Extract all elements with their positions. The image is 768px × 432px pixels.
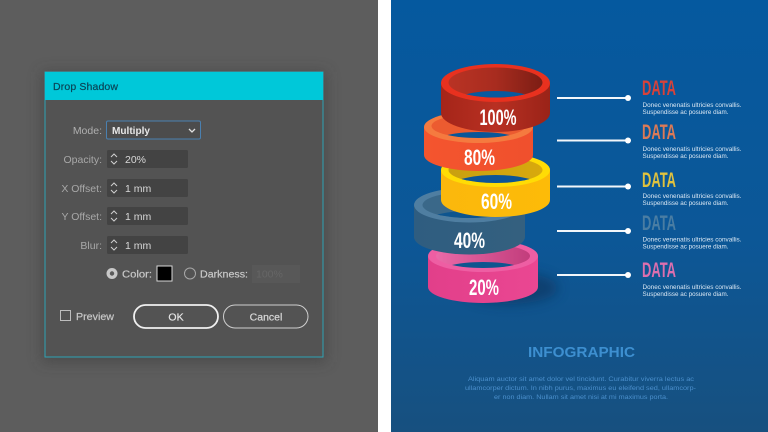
OK button: OK (168, 312, 184, 324)
color and darkness row: Color: (122, 268, 152, 280)
ring: 100% red: 100% (480, 105, 516, 130)
color and darkness row: 100% (256, 268, 283, 280)
x offset row: X Offset: (61, 183, 102, 195)
opacity row: Opacity: (63, 154, 102, 166)
opacity row: 20% (125, 154, 146, 166)
label block: slate data: Donec venenatis ultricies convallis. (642, 238, 742, 244)
body paragraph: Aliquam auctor sit amet dolor vel tincidunt. Curabitur viverra lectus ac (468, 376, 695, 383)
ring: 80% orange: 80% (464, 145, 495, 170)
mode row (73, 121, 200, 139)
label block: pink data: DATA (642, 259, 676, 282)
Cancel button: Cancel (250, 312, 282, 324)
preview checkbox (60, 310, 114, 323)
panel: left gray background (0, 0, 378, 432)
dialog title bar (45, 72, 323, 100)
mode row: Multiply (112, 125, 150, 137)
label block: orange data: DATA (642, 121, 676, 144)
label block: pink data: Suspendisse ac posuere diam. (642, 292, 729, 298)
body paragraph (465, 376, 696, 401)
mode row: Mode: (73, 125, 102, 137)
y offset row (62, 207, 188, 225)
preview checkbox: Preview (76, 311, 114, 323)
label block: yellow data (642, 169, 742, 207)
heading: infographic: INFOGRAPHIC (528, 345, 636, 361)
shadow under ring stack (462, 272, 558, 304)
label block: orange data (642, 121, 742, 160)
y offset row: 1 mm (125, 211, 152, 223)
connector line: 40% (557, 228, 631, 234)
ring: 60% yellow (441, 153, 550, 217)
connector line: 80% (557, 138, 631, 144)
ring: 40% slate blue: 40% (454, 228, 485, 253)
panel: right blue background (391, 0, 768, 432)
label block: red data (642, 77, 742, 116)
x offset row: 1 mm (125, 183, 152, 195)
opacity row (63, 150, 188, 168)
blur row: 1 mm (125, 240, 152, 252)
label block: red data: DATA (642, 77, 676, 100)
color and darkness row: Darkness: (200, 268, 248, 280)
label block: orange data: Suspendisse ac posuere diam. (642, 154, 729, 160)
label block: pink data: Donec venenatis ultricies convallis. (642, 285, 742, 291)
panel: drop shadow dialog (42, 72, 326, 362)
ring: 100% red (441, 64, 550, 132)
connector line: 20% (557, 272, 631, 278)
label block: slate data: Suspendisse ac posuere diam. (642, 244, 729, 250)
Cancel button (224, 305, 308, 328)
label block: slate data (642, 212, 742, 250)
connector line: 60% (557, 184, 631, 190)
label block: yellow data: Suspendisse ac posuere diam. (642, 201, 729, 207)
dialog title bar: Drop Shadow (53, 81, 118, 93)
ring: 20% pink (428, 240, 538, 303)
label block: yellow data: DATA (642, 169, 676, 192)
ring: 40% slate blue (414, 188, 525, 254)
label block: red data: Donec venenatis ultricies convallis. (642, 103, 742, 109)
ring: 60% yellow: 60% (481, 189, 512, 214)
label block: pink data (642, 259, 742, 298)
connector line: 100% (557, 95, 631, 101)
color and darkness row (106, 265, 300, 283)
x offset row (61, 179, 188, 197)
label block: red data: Suspendisse ac posuere diam. (642, 110, 729, 116)
body paragraph: er non diam. Nullam sit amet nisi at mi maximus porta. (494, 394, 668, 401)
label block: orange data: Donec venenatis ultricies convallis. (642, 147, 742, 153)
label block: slate data: DATA (642, 212, 676, 235)
OK button (134, 305, 218, 328)
label block: yellow data: Donec venenatis ultricies convallis. (642, 194, 742, 200)
ring: 20% pink: 20% (469, 275, 499, 300)
blur row (80, 236, 188, 254)
body paragraph: ullamcorper dictum. In nibh purus, maximus eu eleifend sed, ullamcorp- (465, 385, 696, 392)
y offset row: Y Offset: (62, 211, 102, 223)
ring: 80% orange (424, 111, 533, 171)
blur row: Blur: (80, 240, 102, 252)
